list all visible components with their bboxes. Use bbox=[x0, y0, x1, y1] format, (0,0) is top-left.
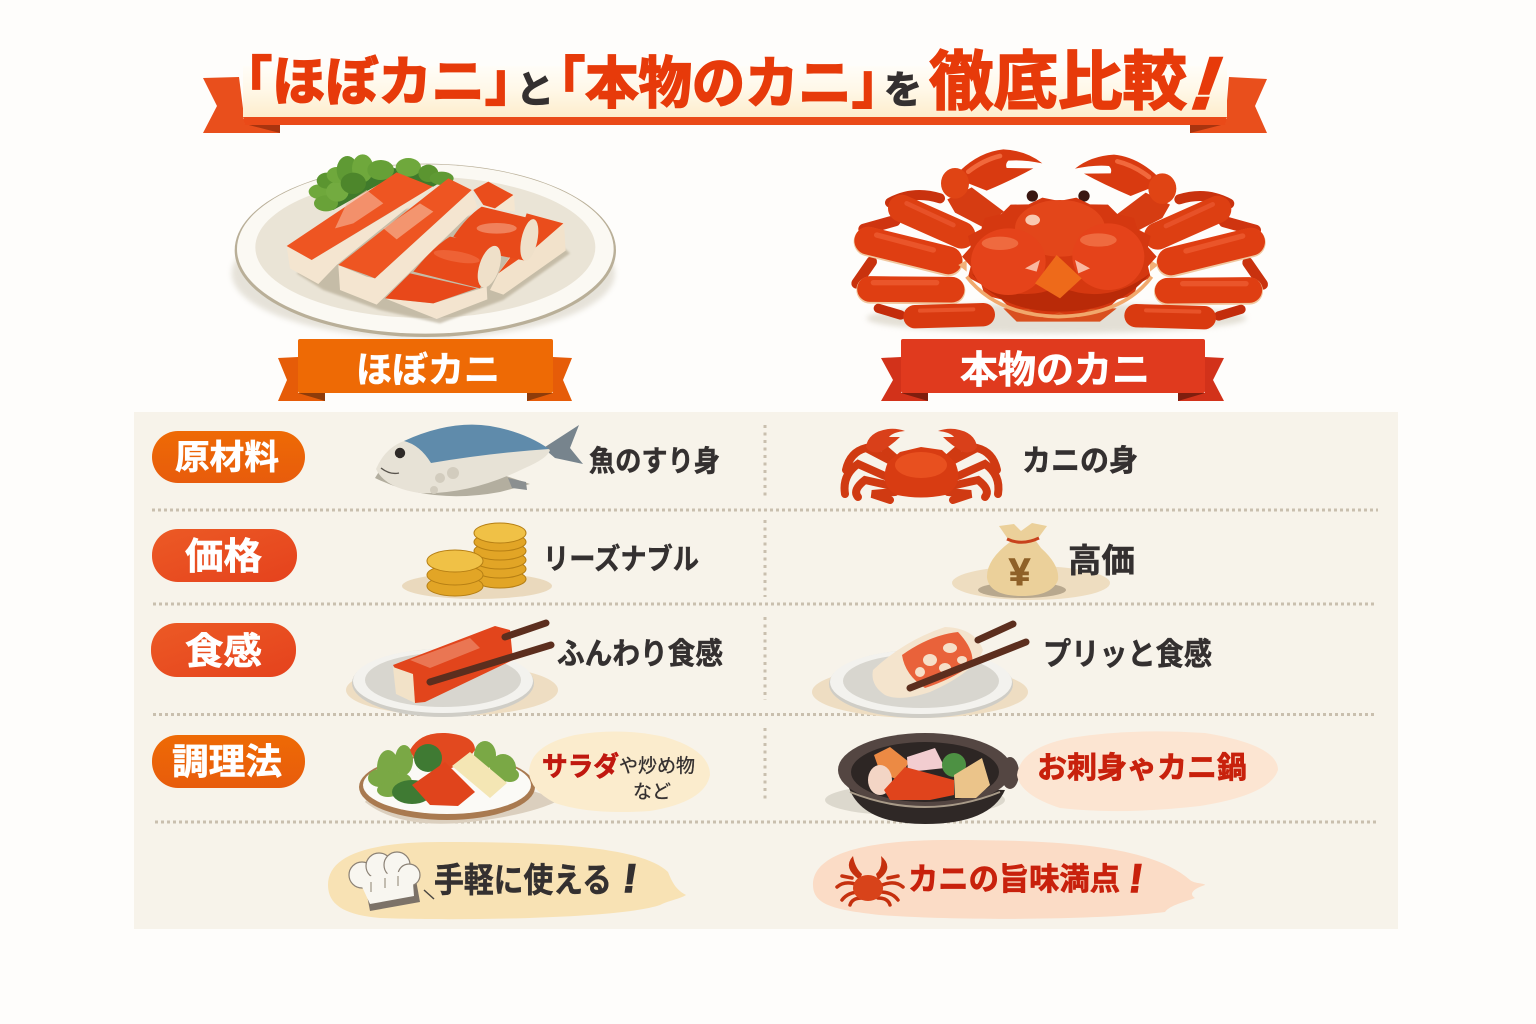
title: 徹底比較: 徹底比較 bbox=[929, 46, 1187, 118]
text: exclamation: ! bbox=[1126, 856, 1146, 901]
icon: money bag bbox=[952, 523, 1110, 600]
text: 魚のすり身: 魚のすり身 bbox=[589, 445, 720, 478]
title bbox=[219, 44, 1224, 124]
pill: 価格 bbox=[152, 529, 297, 582]
title: ほぼカニ: 「ほぼカニ」 bbox=[219, 53, 538, 112]
icon: crab bbox=[837, 856, 903, 905]
icon: fish bbox=[375, 425, 583, 496]
text: カニの旨味満点: カニの旨味満点 bbox=[908, 862, 1120, 897]
pill: 原材料: 原材料 bbox=[175, 439, 279, 477]
bubble: サラダや炒め物など bbox=[529, 731, 710, 812]
table panel bbox=[134, 412, 1398, 929]
icon: plate with crab meat bbox=[812, 624, 1028, 718]
leaves bbox=[309, 154, 454, 211]
bubble: サラダや炒め物など: や炒め物 bbox=[619, 755, 695, 777]
pill: 価格: 価格 bbox=[185, 536, 262, 577]
pill: 調理法 bbox=[152, 735, 305, 788]
pill: 原材料 bbox=[152, 431, 305, 483]
text: 高価: 高価 bbox=[1068, 542, 1135, 579]
text: 手軽に使える: 手軽に使える bbox=[434, 862, 612, 900]
title ribbon bbox=[203, 66, 1267, 133]
text: ふんわり食感: ふんわり食感 bbox=[557, 638, 723, 671]
pill: 食感: 食感 bbox=[185, 631, 262, 672]
illustration: real crab bbox=[857, 149, 1263, 333]
icon: money bag: ¥ bbox=[1009, 552, 1030, 594]
pill: 食感 bbox=[151, 623, 296, 677]
text: リーズナブル: リーズナブル bbox=[543, 542, 699, 576]
label ribbon: ほぼカニ bbox=[278, 339, 572, 401]
text: プリッと食感: プリッと食感 bbox=[1043, 637, 1212, 672]
icon: small crab bbox=[845, 429, 998, 500]
icon: salad plate bbox=[359, 733, 560, 824]
icon: chef hat bbox=[349, 852, 434, 911]
title: 本物のカニ: 「本物のカニ」 bbox=[532, 52, 905, 115]
title: と: と bbox=[516, 70, 554, 112]
pill: 調理法: 調理法 bbox=[172, 741, 282, 782]
label text: 本物のカニ bbox=[960, 350, 1150, 392]
text: exclamation: ! bbox=[620, 856, 640, 901]
icon: coins bbox=[402, 523, 552, 599]
bubble: お刺身やカニ鍋 bbox=[1017, 731, 1278, 811]
bubble: サラダや炒め物など: など bbox=[633, 781, 671, 803]
bubble: カニの旨味満点 bbox=[813, 840, 1205, 919]
icon: plate with crab stick bbox=[346, 623, 558, 717]
eyes bbox=[1027, 190, 1038, 202]
icon: nabe pot bbox=[825, 733, 1019, 824]
bubble: お刺身やカニ鍋: お刺身ゃカニ鍋 bbox=[1037, 752, 1247, 785]
illustration: kani-kama plate bbox=[232, 154, 616, 338]
bubble: サラダや炒め物など: サラダ bbox=[542, 751, 619, 782]
label text: ほぼカニ bbox=[356, 349, 500, 390]
bubble: 手軽に使える bbox=[328, 842, 686, 919]
text: カニの身: カニの身 bbox=[1022, 445, 1138, 478]
shell bbox=[958, 198, 1158, 322]
title: exclamation: ! bbox=[1189, 44, 1224, 124]
crab sticks bbox=[287, 172, 570, 323]
title: を: を bbox=[884, 70, 922, 112]
label ribbon: 本物のカニ bbox=[881, 339, 1224, 401]
